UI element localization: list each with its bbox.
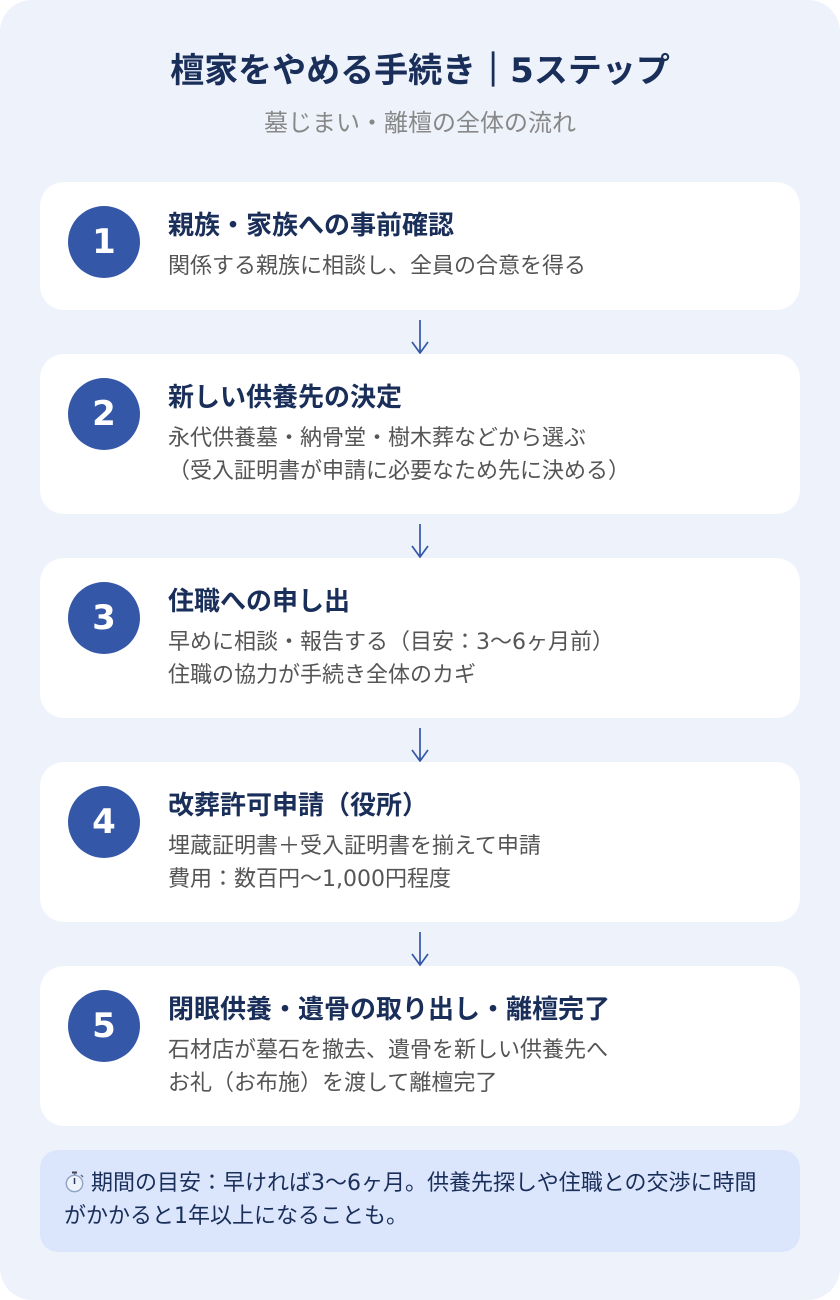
step 5 text: お礼（お布施）を渡して離檀完了 [168,1071,497,1096]
panel: step 3 [40,558,800,718]
arrow 4 to 5 [411,932,429,966]
step 2 text: （受入証明書が申請に必要なため先に決める） [168,459,630,484]
step 4 text: 埋蔵証明書＋受入証明書を揃えて申請 [168,834,541,859]
step 4 text: 費用：数百円〜1,000円程度 [168,867,451,892]
title: 檀家をやめる手続き｜5ステップ [170,51,670,91]
callout: duration note: 期間の目安：早ければ3〜6ヶ月。供養先探しや住職との交渉に時間 [91,1171,757,1196]
step 1 text: 関係する親族に相談し、全員の合意を得る [168,254,586,279]
step 4 number: 4 [92,802,116,842]
panel: step 1 [40,182,800,310]
subtitle: 墓じまい・離檀の全体の流れ [264,109,576,137]
step 2 text: 永代供養墓・納骨堂・樹木葬などから選ぶ [168,426,586,451]
step 3 text: 早めに相談・報告する（目安：3〜6ヶ月前） [168,630,614,655]
panel: step 5 [40,966,800,1126]
step 2 heading: 新しい供養先の決定 [168,383,402,413]
step 2 number [68,378,140,450]
arrow 3 to 4 [411,728,429,762]
step 3 number [68,582,140,654]
icon: stopwatch [66,1172,84,1192]
callout: duration note [40,1150,800,1252]
panel: step 4 [40,762,800,922]
step 1 number: 1 [92,222,116,262]
step 1 heading: 親族・家族への事前確認 [168,211,454,241]
callout: duration note: がかかると1年以上になることも。 [64,1204,408,1229]
step 4 number [68,786,140,858]
step 5 text [168,1038,608,1096]
step 4 text [168,834,541,892]
step 2 text [168,426,630,484]
step 1 number [68,206,140,278]
arrow 1 to 2 [411,320,429,354]
step 4 heading: 改葬許可申請（役所） [168,791,428,821]
step 5 number: 5 [92,1006,116,1046]
step 2 number: 2 [92,394,116,434]
arrow 2 to 3 [411,524,429,558]
step 5 number [68,990,140,1062]
step 3 heading: 住職への申し出 [168,587,350,617]
step 3 number: 3 [92,598,116,638]
step 3 text: 住職の協力が手続き全体のカギ [168,663,476,688]
step 5 heading: 閉眼供養・遺骨の取り出し・離檀完了 [168,995,610,1025]
panel: step 2 [40,354,800,514]
step 3 text [168,630,614,688]
step 5 text: 石材店が墓石を撤去、遺骨を新しい供養先へ [168,1038,608,1063]
